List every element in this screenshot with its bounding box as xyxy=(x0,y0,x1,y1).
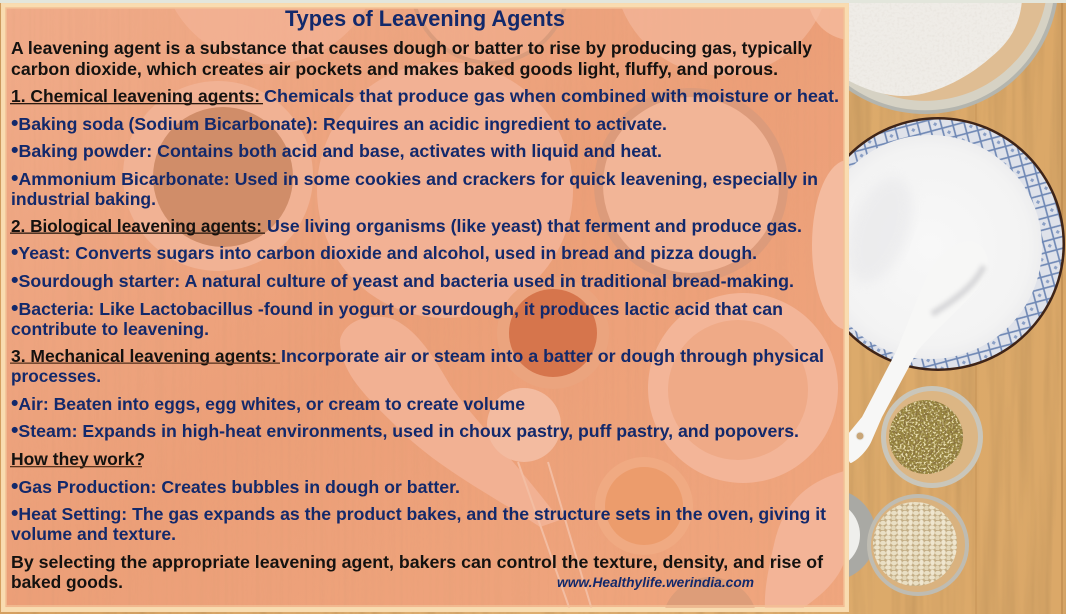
photo: glass bowl of herbs xyxy=(881,386,983,488)
closing statement xyxy=(11,552,823,592)
website credit: www.Healthylife.werindia.com xyxy=(557,575,754,590)
section 3: mechanical leavening agents: Incorporate air or steam into a batter or dough through physical xyxy=(281,346,824,366)
section 2: biological leavening agents: •Bacteria: Like Lactobacillus -found in yogurt or sourdough, it produces lactic acid that can xyxy=(11,297,783,320)
section 1: chemical leavening agents xyxy=(10,86,839,209)
section 3: mechanical leavening agents: processes. xyxy=(11,366,101,386)
section 1: chemical leavening agents: industrial baking. xyxy=(11,189,156,209)
section: how they work: •Gas Production: Creates bubbles in dough or batter. xyxy=(11,475,460,498)
section: how they work: volume and texture. xyxy=(11,524,176,544)
section 1: chemical leavening agents: Chemicals that produce gas when combined with moisture or heat. xyxy=(264,86,839,106)
photo: bowl of flour xyxy=(0,0,1066,114)
photo: white spoon xyxy=(848,241,988,463)
intro paragraph xyxy=(11,38,812,79)
section 3: mechanical leavening agents: •Steam: Expands in high-heat environments, used in choux pastry, puff pastry, and popovers. xyxy=(11,419,799,442)
photo: glass bowl of sesame seeds xyxy=(867,494,969,596)
section: how they work: How they work? xyxy=(11,449,145,469)
section 1: chemical leavening agents: •Baking soda (Sodium Bicarbonate): Requires an acidic ingredient to activate. xyxy=(11,112,667,135)
photo: grey dish xyxy=(784,489,876,581)
intro paragraph: A leavening agent is a substance that causes dough or batter to rise by producing gas, typically xyxy=(11,38,812,58)
closing statement: baked goods. xyxy=(11,572,123,592)
section 1: chemical leavening agents: •Ammonium Bicarbonate: Used in some cookies and crackers for quick leavening, especially in xyxy=(11,167,818,190)
closing statement: By selecting the appropriate leavening agent, bakers can control the texture, density, and rise of xyxy=(11,552,823,572)
section 2: biological leavening agents: contribute to leavening. xyxy=(11,319,209,339)
section 1: chemical leavening agents: •Baking powder: Contains both acid and base, activates with liquid and heat. xyxy=(11,139,662,162)
section 2: biological leavening agents: 2. Biological leavening agents: xyxy=(11,216,262,236)
section 2: biological leavening agents: •Sourdough starter: A natural culture of yeast and bacteria used in traditional bread-making. xyxy=(11,269,794,292)
section 3: mechanical leavening agents xyxy=(10,346,824,442)
title: Types of Leavening Agents xyxy=(285,6,565,31)
section 2: biological leavening agents xyxy=(10,216,802,339)
text panel with translucent orange overlay xyxy=(1,0,849,612)
section 3: mechanical leavening agents: 3. Mechanical leavening agents: xyxy=(11,346,277,366)
section: how they work xyxy=(10,449,826,544)
intro paragraph: carbon dioxide, which creates air pockets and makes baked goods light, fluffy, and porous. xyxy=(11,59,778,79)
section 1: chemical leavening agents: 1. Chemical leavening agents: xyxy=(11,86,260,106)
section 3: mechanical leavening agents: •Air: Beaten into eggs, egg whites, or cream to create volume xyxy=(11,392,525,415)
section 2: biological leavening agents: •Yeast: Converts sugars into carbon dioxide and alcohol, used in bread and pizza dough. xyxy=(11,241,757,264)
section 2: biological leavening agents: Use living organisms (like yeast) that ferment and produce gas. xyxy=(267,216,802,236)
photo: plate of sugar xyxy=(811,117,1065,371)
section: how they work: •Heat Setting: The gas expands as the product bakes, and the structure sets in the oven, giving it xyxy=(11,502,826,525)
